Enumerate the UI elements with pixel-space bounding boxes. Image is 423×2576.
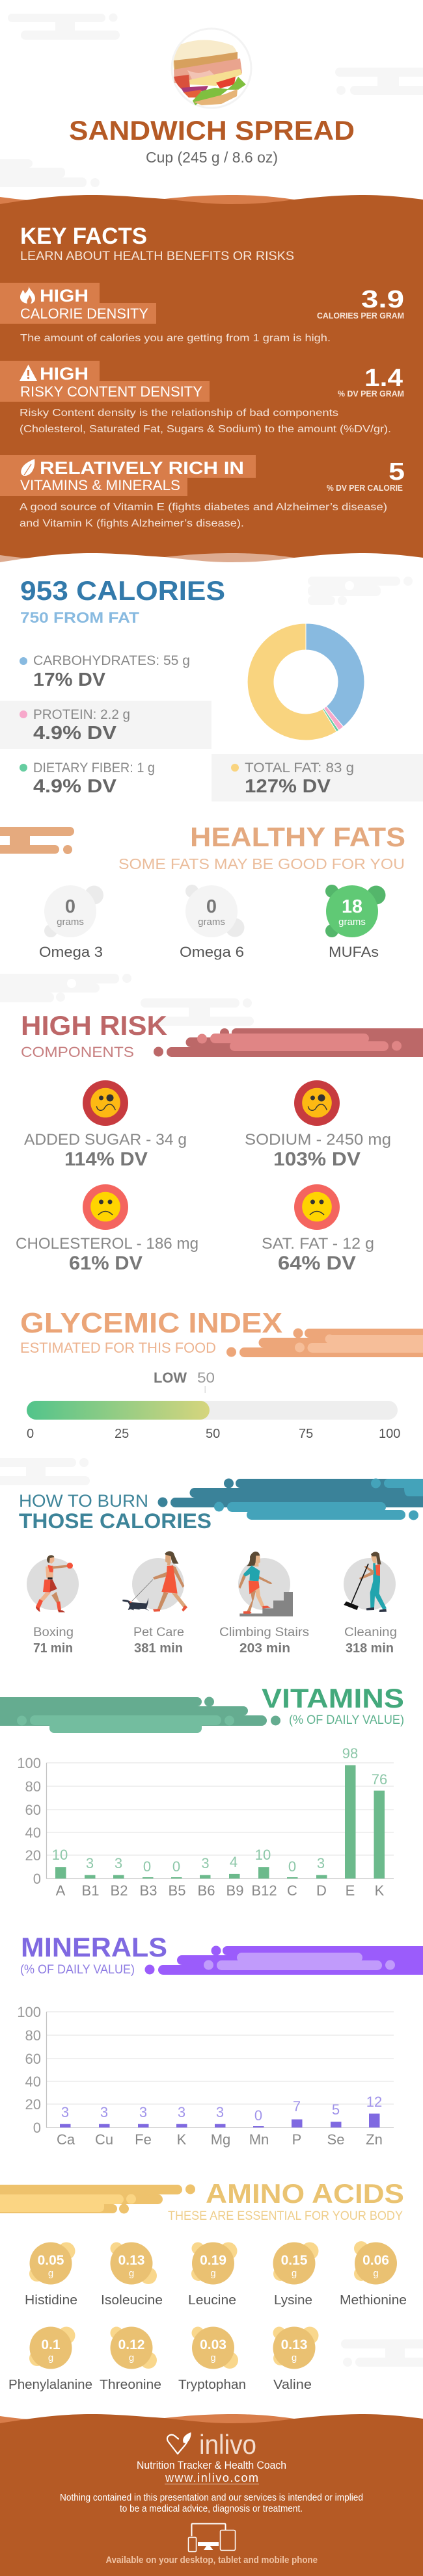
amino: methionine: 0.06	[362, 2253, 389, 2268]
risk: sodium: 103% DV	[273, 1149, 361, 1170]
gauge scale: 75	[299, 1427, 313, 1441]
panel: vitamins	[0, 1683, 404, 1899]
amino: tryptophan	[178, 2327, 246, 2392]
bar chart: vitamins	[17, 1745, 394, 1899]
icon: warning	[20, 365, 37, 381]
omega 3: Omega 3	[39, 944, 103, 960]
legend: carbohydrates	[20, 653, 190, 690]
amino: lysine	[273, 2243, 319, 2308]
icon: sad face	[83, 1184, 128, 1230]
amino: histidine: Histidine	[25, 2293, 77, 2308]
activity: cleaning: Cleaning	[344, 1626, 397, 1639]
fact: calorie density: The amount of calories you are getting from 1 gram is high.	[20, 333, 331, 344]
risk: saturated fat: SAT. FAT - 12 g	[262, 1235, 374, 1253]
bar chart: minerals: K	[177, 2131, 187, 2148]
background clouds middle	[0, 974, 254, 1026]
bar chart: vitamins: B3	[140, 1882, 157, 1899]
bar chart: vitamins: 3	[201, 1855, 210, 1871]
high risk subheading: COMPONENTS	[21, 1044, 134, 1060]
bar chart: minerals: 3	[100, 2104, 108, 2120]
key facts heading: KEY FACTS	[20, 224, 147, 249]
activity: climbing stairs	[219, 1552, 309, 1656]
activity: pet care	[122, 1551, 187, 1656]
bar chart: minerals: Fe	[135, 2131, 152, 2148]
risk: saturated fat: 64% DV	[278, 1253, 356, 1274]
panel: high risk	[16, 1010, 423, 1274]
amino: valine	[273, 2327, 319, 2392]
legend: protein: 4.9% DV	[33, 723, 117, 744]
risk: cholesterol: CHOLESTEROL - 186 mg	[16, 1235, 198, 1253]
legend: total fat: 127% DV	[245, 776, 331, 797]
legend: protein: PROTEIN: 2.2 g	[33, 707, 130, 722]
omega 3: 0	[65, 896, 75, 917]
amino: threonine	[100, 2327, 161, 2392]
glycemic index subheading: ESTIMATED FOR THIS FOOD	[20, 1340, 216, 1356]
amino: isoleucine	[101, 2243, 163, 2308]
fact: vitamins and minerals	[0, 455, 405, 529]
icon: woman sweeping	[344, 1552, 387, 1612]
bar chart: minerals: Ca	[57, 2131, 75, 2148]
amino: leucine: Leucine	[188, 2293, 236, 2308]
fact: risky content density	[0, 361, 404, 435]
bar chart: minerals: Mn	[249, 2131, 269, 2148]
amino: lysine: Lysine	[274, 2293, 312, 2308]
panel: glycemic index	[20, 1307, 423, 1441]
hero: food image	[172, 29, 251, 108]
banner: burn stripes	[157, 1478, 423, 1520]
amino: phenylalanine: g	[48, 2352, 53, 2363]
disclaimer: Nothing contained in this presentation and our services is intended or implied	[60, 2493, 363, 2503]
how to burn heading: HOW TO BURN	[19, 1491, 148, 1511]
amino: leucine	[188, 2243, 237, 2308]
amino: lysine: 0.15	[281, 2253, 308, 2268]
legend: carbohydrates: CARBOHYDRATES: 55 g	[33, 653, 190, 668]
minerals heading: MINERALS	[21, 1932, 167, 1962]
healthy fats subheading: SOME FATS MAY BE GOOD FOR YOU	[118, 855, 405, 872]
omega 3	[39, 885, 103, 960]
bar chart: minerals: Zn	[366, 2131, 383, 2148]
risk: saturated fat	[262, 1184, 374, 1274]
bar chart: vitamins: D	[316, 1882, 327, 1899]
mufas: 18	[342, 896, 362, 917]
bar chart: vitamins: 20	[25, 1847, 41, 1864]
activity: climbing stairs: 203 min	[239, 1641, 290, 1656]
amino: isoleucine: g	[129, 2268, 134, 2279]
amino: lysine: g	[292, 2268, 297, 2279]
website link: www.inlivo.com	[165, 2471, 258, 2484]
banner: minerals stripes	[144, 1946, 423, 1975]
bar chart: vitamins: 98	[342, 1745, 358, 1762]
bar chart: minerals: 3	[216, 2104, 224, 2120]
bar chart: vitamins: 3	[115, 1855, 122, 1871]
risk: added sugar	[24, 1080, 187, 1170]
tagline: Nutrition Tracker & Health Coach	[137, 2459, 286, 2471]
bar chart: vitamins: 0	[172, 1858, 180, 1875]
bar chart: minerals: 3	[61, 2104, 69, 2120]
banner: healthy fats stripes	[0, 827, 74, 854]
bar chart: minerals: 40	[25, 2074, 41, 2090]
icon: boxer	[36, 1555, 73, 1612]
amino: threonine: 0.12	[118, 2337, 144, 2352]
amino: leucine: g	[210, 2268, 216, 2279]
legend: dietary fiber: 4.9% DV	[33, 776, 117, 797]
bar chart: minerals: 7	[293, 2098, 301, 2114]
bar chart: vitamins: C	[287, 1882, 297, 1899]
fact: risky content density: (Cholesterol, Saturated Fat, Sugars & Sodium) to the amount (%DV/gr).	[20, 424, 391, 435]
risk: cholesterol	[16, 1184, 198, 1274]
amino: phenylalanine	[8, 2327, 92, 2392]
risk: cholesterol: 61% DV	[69, 1253, 143, 1274]
mufas: MUFAs	[329, 944, 379, 960]
legend: dietary fiber: DIETARY FIBER: 1 g	[33, 761, 155, 775]
amino: methionine: g	[373, 2268, 379, 2279]
availability note: Available on your desktop, tablet and mobile phone	[105, 2555, 318, 2566]
amino: tryptophan: 0.03	[200, 2337, 226, 2352]
bar chart: vitamins: 0	[288, 1858, 296, 1875]
bar chart: minerals: 0	[33, 2120, 41, 2136]
bar chart: vitamins: B12	[251, 1882, 277, 1899]
amino: isoleucine: Isoleucine	[101, 2293, 163, 2308]
bar chart: vitamins: 10	[255, 1847, 271, 1863]
mufas: grams	[338, 917, 366, 928]
gauge scale: 50	[206, 1427, 220, 1441]
gauge value	[154, 1370, 215, 1393]
bar chart: vitamins: B9	[226, 1882, 243, 1899]
bar chart: vitamins: 4	[230, 1854, 238, 1870]
bar chart: vitamins: K	[375, 1882, 385, 1899]
donut chart	[247, 623, 364, 740]
fact: risky content density: HIGH	[40, 364, 89, 384]
gauge scale: 25	[115, 1427, 129, 1441]
glycemic index heading: GLYCEMIC INDEX	[20, 1307, 282, 1339]
activity: boxing	[27, 1555, 79, 1656]
panel: minerals	[17, 1932, 423, 2148]
omega 6: Omega 6	[180, 944, 244, 960]
icon: flame	[20, 286, 35, 304]
bar chart: minerals: P	[292, 2131, 301, 2148]
vitamins heading: VITAMINS	[262, 1683, 404, 1713]
bar chart: minerals: 5	[332, 2101, 340, 2118]
bar chart: minerals: 0	[254, 2107, 262, 2124]
logo wordmark: inlivo	[199, 2429, 256, 2460]
those calories heading: THOSE CALORIES	[19, 1509, 212, 1533]
bar chart: minerals: Se	[327, 2131, 344, 2148]
omega 6: grams	[198, 917, 225, 928]
bar chart: minerals: 3	[178, 2104, 185, 2120]
bar chart: vitamins: A	[56, 1882, 66, 1899]
fact: calorie density	[0, 283, 404, 344]
fact: vitamins and minerals: RELATIVELY RICH IN	[40, 458, 244, 478]
fact: risky content density: % DV PER GRAM	[338, 389, 404, 398]
banner: vitamins stripes	[0, 1697, 280, 1733]
calories heading: 953 CALORIES	[20, 575, 225, 606]
high risk heading: HIGH RISK	[21, 1010, 167, 1041]
bar chart: vitamins: B5	[169, 1882, 185, 1899]
bar chart: vitamins: 60	[25, 1802, 41, 1818]
serving size: Cup (245 g / 8.6 oz)	[146, 149, 278, 166]
amino: threonine: g	[129, 2352, 134, 2363]
bar chart: vitamins: 100	[17, 1755, 41, 1771]
amino: histidine: 0.05	[38, 2253, 64, 2268]
icon: queasy face	[83, 1080, 128, 1126]
amino acids subheading: THESE ARE ESSENTIAL FOR YOUR BODY	[168, 2209, 403, 2223]
vitamins subheading: (% OF DAILY VALUE)	[289, 1713, 404, 1727]
risk: sodium: SODIUM - 2450 mg	[245, 1131, 391, 1149]
omega 6	[180, 885, 245, 960]
bar chart: vitamins: 0	[143, 1858, 151, 1875]
panel: how to burn	[19, 1478, 423, 1656]
activity: pet care: Pet Care	[133, 1626, 184, 1639]
bar chart: minerals: 20	[25, 2096, 41, 2113]
fact: calorie density: CALORIES PER GRAM	[317, 311, 404, 320]
icon: inlivo heart logo	[167, 2432, 191, 2454]
activity: climbing stairs: Climbing Stairs	[219, 1626, 309, 1639]
bar chart: vitamins: 40	[25, 1825, 41, 1841]
amino: tryptophan: g	[210, 2352, 216, 2363]
key facts subheading: LEARN ABOUT HEALTH BENEFITS OR RISKS	[20, 250, 294, 263]
risk: added sugar: 114% DV	[64, 1149, 148, 1170]
omega 3: grams	[57, 917, 84, 928]
bar chart: vitamins: B1	[82, 1882, 99, 1899]
risk: added sugar: ADDED SUGAR - 34 g	[24, 1131, 187, 1149]
gauge value: LOW	[154, 1370, 187, 1386]
gauge scale	[27, 1427, 400, 1441]
bar chart: minerals: 12	[366, 2094, 382, 2110]
bar chart: vitamins: B2	[111, 1882, 128, 1899]
amino: methionine: Methionine	[340, 2293, 407, 2308]
panel: amino acids	[0, 2178, 407, 2392]
fact: risky content density: Risky Content density is the relationship of bad components	[20, 408, 338, 419]
bar chart: minerals: 100	[17, 2004, 41, 2020]
amino acids heading: AMINO ACIDS	[206, 2178, 404, 2209]
legend: total fat	[231, 761, 354, 797]
background cloud	[0, 1458, 90, 1485]
fact: risky content density: RISKY CONTENT DENSITY	[20, 384, 202, 400]
from fat subheading: 750 FROM FAT	[20, 609, 139, 626]
amino: histidine: g	[48, 2268, 53, 2279]
fact: vitamins and minerals: A good source of Vitamin E (fights diabetes and Alzheimer’s disease)	[20, 502, 387, 513]
bar chart: vitamins: 0	[33, 1871, 41, 1887]
activity: pet care: 381 min	[134, 1641, 183, 1656]
fact: calorie density: HIGH	[40, 286, 89, 306]
bar chart: vitamins: 10	[52, 1847, 68, 1863]
amino: valine: g	[292, 2352, 297, 2363]
fact: calorie density: 3.9	[361, 286, 404, 313]
gauge scale: 0	[27, 1427, 34, 1441]
icon: woman walking dog	[122, 1551, 187, 1612]
amino: tryptophan: Tryptophan	[178, 2378, 246, 2392]
gauge scale: 100	[379, 1427, 400, 1441]
bar chart: vitamins: 3	[86, 1855, 94, 1871]
amino: threonine: Threonine	[100, 2378, 161, 2392]
fact: vitamins and minerals: VITAMINS & MINERALS	[20, 477, 180, 493]
fact: vitamins and minerals: % DV PER CALORIE	[327, 483, 403, 493]
amino: leucine: 0.19	[200, 2253, 226, 2268]
title	[69, 115, 355, 166]
amino: valine: 0.13	[281, 2337, 307, 2352]
minerals subheading: (% OF DAILY VALUE)	[20, 1963, 135, 1977]
amino: phenylalanine: Phenylalanine	[8, 2378, 92, 2392]
healthy fats heading: HEALTHY FATS	[190, 822, 405, 852]
amino: methionine	[340, 2241, 407, 2308]
panel: healthy fats	[0, 822, 405, 960]
icon: leaf	[21, 459, 34, 476]
bar chart: minerals: Cu	[95, 2131, 113, 2148]
disclaimer: to be a medical advice, diagnosis or treatment.	[120, 2504, 303, 2514]
legend: carbohydrates: 17% DV	[33, 670, 106, 690]
bar chart: vitamins: 3	[317, 1855, 325, 1871]
icon: queasy face	[294, 1080, 340, 1126]
disclaimer	[60, 2493, 363, 2514]
bar chart: vitamins: E	[346, 1882, 355, 1899]
legend: dietary fiber	[20, 761, 155, 797]
panel: key facts	[0, 195, 423, 573]
icon: devices	[189, 2523, 236, 2552]
mufas	[325, 885, 385, 960]
icon: woman on stairs	[239, 1552, 293, 1617]
bar chart: vitamins: 76	[372, 1771, 387, 1788]
bar chart: vitamins: B6	[198, 1882, 215, 1899]
fact: vitamins and minerals: 5	[389, 458, 405, 486]
banner: glycemic stripes	[226, 1329, 423, 1357]
fact: vitamins and minerals: and Vitamin K (fights Alzheimer’s disease).	[20, 518, 244, 529]
activity: cleaning: 318 min	[346, 1641, 394, 1656]
fact: calorie density: CALORIE DENSITY	[20, 306, 148, 322]
gauge value: 50	[197, 1370, 215, 1386]
amino: phenylalanine: 0.1	[41, 2337, 61, 2352]
bar chart: minerals: Mg	[211, 2131, 230, 2148]
icon: sad face	[294, 1184, 340, 1230]
amino: valine: Valine	[273, 2378, 312, 2392]
banner: high risk stripes	[154, 1028, 423, 1057]
bar chart: minerals: 80	[25, 2027, 41, 2044]
activity: cleaning	[344, 1552, 397, 1656]
background cloud bottom	[341, 2339, 423, 2367]
background clouds top	[0, 13, 423, 187]
legend: protein	[20, 707, 130, 744]
bar chart: vitamins: 80	[25, 1778, 41, 1795]
omega 6: 0	[206, 896, 217, 917]
gauge bar	[27, 1401, 398, 1420]
amino: isoleucine: 0.13	[118, 2253, 144, 2268]
legend: total fat: TOTAL FAT: 83 g	[245, 761, 354, 775]
activity: boxing: 71 min	[33, 1641, 73, 1656]
panel: footer	[0, 2414, 423, 2576]
risk: sodium	[245, 1080, 391, 1170]
activity: boxing: Boxing	[33, 1626, 74, 1639]
title: SANDWICH SPREAD	[69, 115, 355, 146]
fact: risky content density: 1.4	[364, 365, 403, 392]
panel: calories	[0, 575, 423, 801]
amino: histidine	[25, 2243, 77, 2308]
bar chart: minerals: 3	[139, 2104, 147, 2120]
banner: amino stripes	[0, 2184, 195, 2214]
bar chart: minerals: 60	[25, 2051, 41, 2067]
bar chart: minerals	[17, 2004, 394, 2148]
